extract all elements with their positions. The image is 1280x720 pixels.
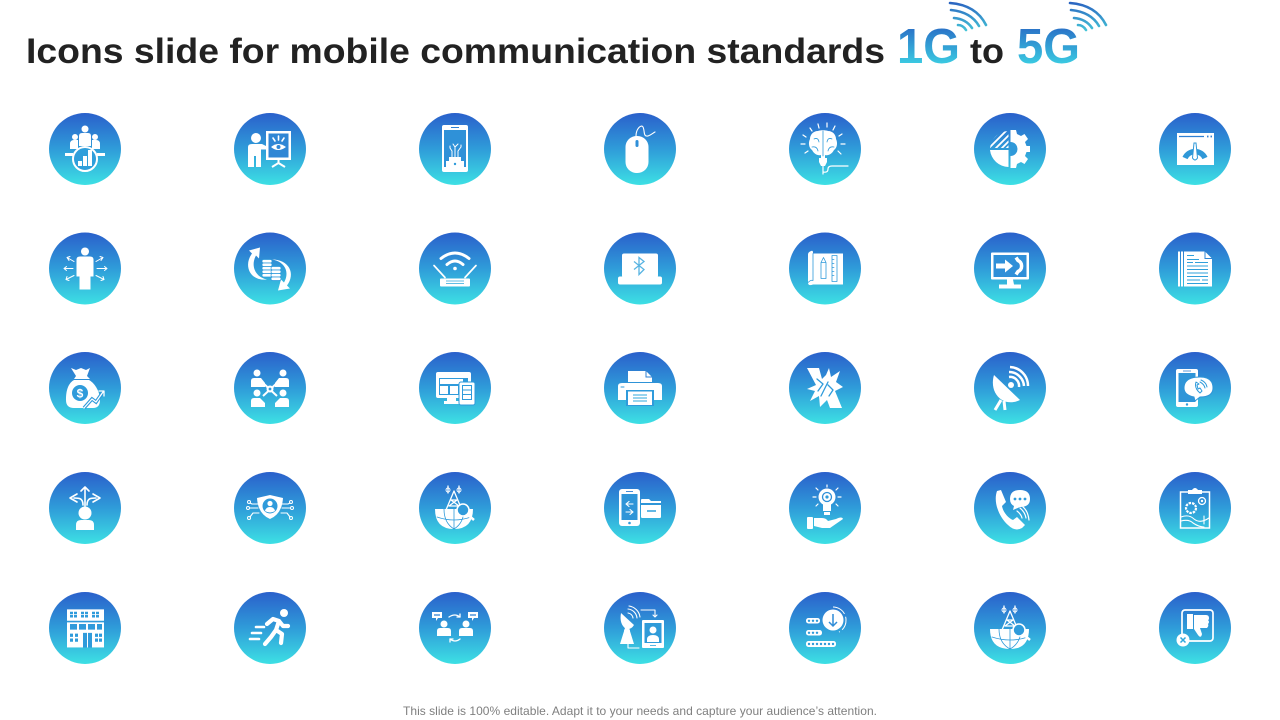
icon: running person bbox=[234, 592, 306, 664]
title: 1G bbox=[897, 20, 960, 74]
icon: person with outward arrows bbox=[49, 232, 121, 304]
title: Icons slide for mobile communication standards bbox=[26, 32, 885, 71]
title: 5G bbox=[1017, 20, 1080, 74]
icon: browser speedometer bbox=[1159, 113, 1231, 185]
icon: brain idea bulb bbox=[789, 113, 861, 185]
icon: globe tower search large bbox=[974, 592, 1046, 664]
icon: clipboard with gears bbox=[1159, 472, 1231, 544]
icon: blueprint with pencil and ruler bbox=[789, 232, 861, 304]
icon: document pages bbox=[1159, 232, 1231, 304]
icon: phone handset with chat bbox=[974, 472, 1046, 544]
icon: bluetooth laptop bbox=[604, 232, 676, 304]
icon: satellite to phone bbox=[604, 592, 676, 664]
icon: money bag growth bbox=[49, 352, 121, 424]
icon: collision star bbox=[789, 352, 861, 424]
icon: responsive devices bbox=[419, 352, 491, 424]
footer note: This slide is 100% editable. Adapt it to your needs and capture your audience’s attention. bbox=[403, 704, 877, 718]
icon: smartphone circuit bbox=[419, 113, 491, 185]
icon: wifi router bbox=[419, 232, 491, 304]
icon: money bag growth: $ bbox=[77, 386, 84, 400]
title bbox=[26, 20, 1080, 74]
icon: shield person circuit bbox=[234, 472, 306, 544]
icon: wifi signal over 5G bbox=[1070, 3, 1106, 30]
icon: monitor with arrow and gear bbox=[974, 232, 1046, 304]
icon: thumbs down rejected bbox=[1159, 592, 1231, 664]
icon: server download bbox=[789, 592, 861, 664]
icon: computer mouse bbox=[604, 113, 676, 185]
icon: globe tower search bbox=[419, 472, 491, 544]
icon: printer bbox=[604, 352, 676, 424]
icon: connected people network bbox=[234, 352, 306, 424]
icon: satellite dish signal bbox=[974, 352, 1046, 424]
icon: team analytics bbox=[49, 113, 121, 185]
icon: coins with circular arrows bbox=[234, 232, 306, 304]
title: to bbox=[970, 32, 1004, 71]
icon: smartphone call bubble bbox=[1159, 352, 1231, 424]
icon: pie chart and gear bbox=[974, 113, 1046, 185]
icon: idea gear bulb in hand bbox=[789, 472, 861, 544]
icon: two people conversation bbox=[419, 592, 491, 664]
icon: office building bbox=[49, 592, 121, 664]
icon: person with three arrows bbox=[49, 472, 121, 544]
icon: presenter with vision board bbox=[234, 113, 306, 185]
icon: phone file transfer bbox=[604, 472, 676, 544]
icon: wifi signal over 1G bbox=[950, 3, 986, 30]
